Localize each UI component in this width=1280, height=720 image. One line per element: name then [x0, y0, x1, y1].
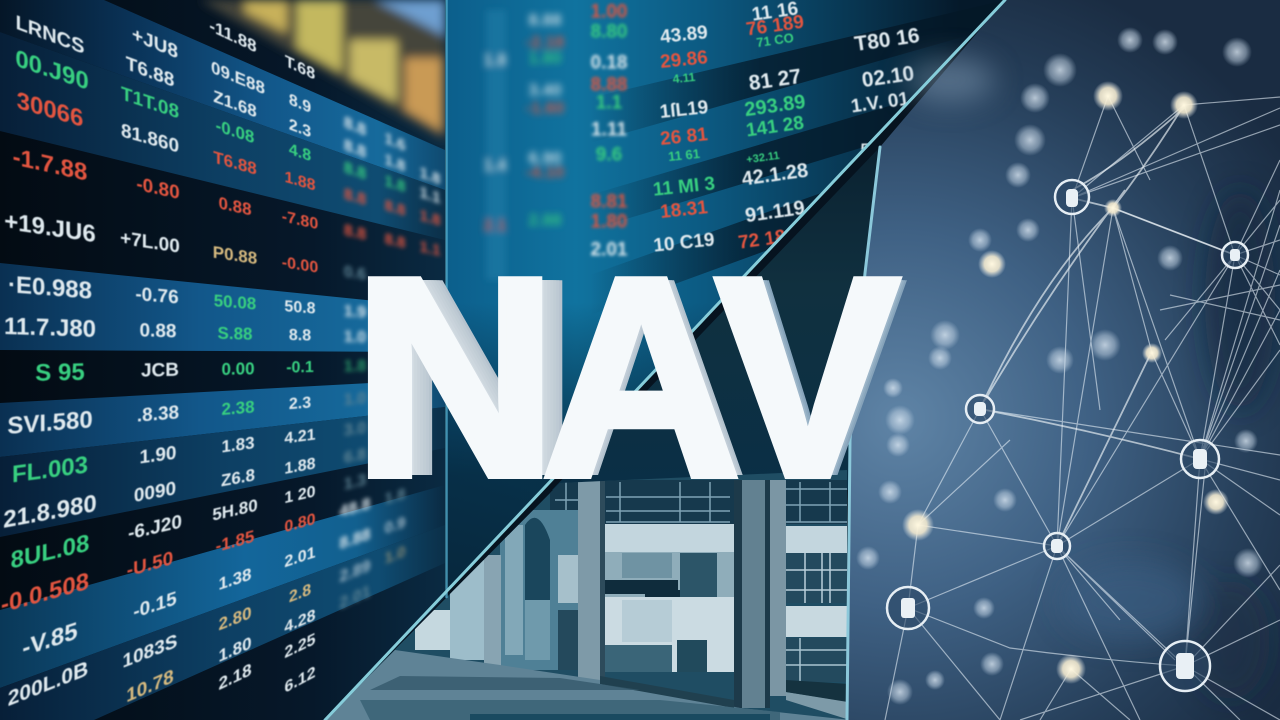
left board figures: 2.8 [289, 580, 311, 606]
columns [484, 480, 786, 708]
left board figures: -0.1 [286, 359, 314, 376]
left board figures: 1.88 [284, 168, 316, 195]
left board figures: -1.7.88 [13, 143, 87, 187]
center board figures: -2.18 [526, 32, 564, 52]
left board figures: 2.38 [221, 397, 255, 419]
center board figures: 29.86 [659, 47, 709, 73]
left board figures: .8.38 [137, 402, 179, 427]
center board figures: 43.89 [659, 22, 709, 48]
center board figures: 9.6 [596, 144, 622, 166]
far blurred columns: 1.8 [420, 164, 441, 189]
far blurred columns: 8.8 [344, 135, 366, 162]
center board figures: 1.80 [528, 48, 562, 68]
center board figures: 8.81 [591, 192, 628, 212]
center board figures: 1.00 [591, 2, 627, 22]
center board figures: +32.11 [746, 150, 780, 166]
bokeh dots [856, 27, 1263, 705]
center board figures: 293.89 [743, 91, 807, 121]
panel: dark wedge behind the letters [552, 147, 880, 490]
far blurred columns: 1.1 [420, 184, 441, 208]
center board figures: 3.40 [528, 80, 562, 100]
left board figures: 6.12 [284, 663, 316, 697]
upper storey glass [550, 480, 850, 524]
floor [325, 650, 850, 720]
center board figures: 76 189 [745, 12, 805, 40]
center board figures: 1.1 [596, 92, 623, 114]
far blurred columns: 1.8 [385, 485, 406, 508]
thick double links [980, 105, 1235, 546]
center board figures: 18.31 [659, 197, 709, 223]
far blurred columns: 6.8 [344, 445, 366, 467]
left board figures: -7.80 [282, 207, 318, 233]
left board figures: T.68 [285, 51, 315, 84]
title: NAV: V [716, 218, 899, 534]
far blurred columns: 8.8 [344, 221, 366, 244]
left board figures: 1083S [123, 630, 177, 673]
left board figures: LRNCS [16, 11, 84, 59]
left board figures: -U.50 [127, 547, 173, 582]
far blurred columns: 1.8 [385, 151, 406, 176]
left board figures: 0.88 [218, 192, 252, 220]
title: NAV: N [353, 218, 557, 534]
left board figures: JCB [141, 360, 179, 382]
center board figures: -1.60 [526, 98, 564, 118]
left board figures: T1T.08 [121, 83, 179, 123]
ring icons [901, 189, 1240, 679]
far blurred columns: 1.8 [420, 207, 441, 230]
left board figures: -V.85 [22, 618, 78, 662]
far blurred columns: 1.3 [344, 471, 366, 494]
left board figures: 1.83 [221, 433, 255, 456]
center board figures: 1.V. 01 [850, 88, 911, 117]
far blurred columns: 48.8 [339, 495, 371, 521]
center board figures [483, 0, 921, 280]
left board figures: -11.88 [209, 15, 257, 57]
title: NAV [353, 218, 907, 534]
center board figures: 91.119 [744, 197, 806, 227]
left board figures: SVI.580 [7, 406, 93, 440]
left board figures: +7L.00 [120, 228, 180, 258]
left board figures: -6.J20 [128, 511, 182, 545]
center board figures: 71 CO [755, 30, 795, 50]
far blurred columns: 8.8 [385, 231, 405, 252]
far blurred columns: 1.0 [385, 543, 406, 568]
left board figures: 8UL.08 [11, 530, 89, 574]
far blurred columns: 8.8 [344, 158, 366, 183]
center board figures: 2.88 [528, 210, 562, 230]
left board figures: P0.88 [213, 243, 257, 268]
left board figures: 1.38 [218, 564, 252, 594]
left board figures: 200L.0B [8, 656, 88, 711]
far blurred columns: 2.01 [339, 581, 371, 613]
left board figures: +19.JU6 [4, 208, 96, 248]
panel: center stock board [446, 0, 1002, 588]
center board figures: 2.01 [591, 240, 628, 260]
left board figures: -0.80 [136, 174, 180, 204]
panel: right network [847, 0, 1280, 720]
left board figures: 00.J90 [15, 45, 89, 96]
left board figures: 2.25 [284, 629, 316, 662]
center board figures: 8.80 [591, 22, 627, 42]
center board figures: 10 C19 [652, 229, 716, 257]
left board figures: 4.28 [284, 605, 316, 637]
left board figures: 30066 [17, 87, 83, 133]
left board figures: 8.8 [289, 327, 311, 345]
left board figures: -0.00 [282, 253, 318, 277]
center board figures: 11 61 [667, 146, 701, 164]
left board figures: T6.88 [213, 147, 257, 179]
left board figures: 4.8 [289, 140, 311, 165]
center board figures: 8.88 [528, 10, 562, 30]
frame lines [325, 0, 1005, 720]
left board figures: Z6.8 [221, 464, 255, 490]
left board figures: -1.85 [216, 526, 255, 556]
center board figures: 1ſL19 [659, 97, 709, 123]
left board figures: 1.80 [218, 633, 252, 666]
left board figures: -0.15 [133, 587, 177, 623]
panel: left stock board [0, 0, 445, 720]
left board figures: FL.003 [12, 451, 88, 489]
far blurred columns: 1.0 [344, 389, 366, 409]
left board figures: 2.80 [218, 602, 252, 634]
far blurred columns: 1.9 [344, 302, 366, 322]
center board figures: 1.80 [591, 212, 627, 232]
far blurred columns: 8.8 [344, 185, 366, 209]
far blurred columns [339, 112, 441, 613]
far blurred columns: 1.0 [344, 329, 366, 346]
center board figures: 11 MI 3 [652, 173, 716, 201]
center board figures: 26 81 [659, 124, 709, 150]
left board figures: 81.860 [121, 119, 179, 158]
left board figures: +JU8 [132, 23, 178, 63]
center board figures: 5 [861, 142, 870, 158]
center board figures: 1.8 [483, 50, 507, 70]
center board figures: 141 28 [745, 113, 805, 141]
center board figures: 6.90 [528, 148, 562, 168]
left board figures: 0090 [134, 478, 176, 507]
center board figures: 42.1.28 [740, 159, 810, 191]
left board figures: T6.88 [126, 53, 174, 92]
soft haze [905, 58, 1275, 700]
left board figures: 50.08 [214, 291, 256, 313]
far blurred columns: 3.0 [344, 419, 366, 440]
board row bands [0, 0, 445, 720]
far blurred columns: 0.6 [344, 263, 366, 284]
windows [604, 552, 848, 682]
far blurred columns: 2.89 [339, 556, 371, 586]
center board figures: 2.1 [483, 216, 507, 234]
center board figures: 0.18 [591, 52, 627, 74]
center board figures: 4.11 [672, 70, 696, 86]
left board figures: 8.9 [289, 90, 311, 117]
center board figures: 8.88 [591, 74, 627, 96]
far blurred columns: 8.88 [339, 525, 371, 553]
far blurred columns: 1.8 [344, 358, 366, 375]
left board figures: 1.88 [284, 454, 316, 478]
center board figures: 1.11 [591, 120, 627, 140]
left board figures: 0.00 [221, 359, 255, 379]
left board figures: 50.8 [284, 297, 316, 318]
center board figures: 02.10 [860, 62, 916, 92]
center board figures: 72 18 [737, 226, 787, 254]
white floor bands [604, 524, 848, 553]
left board figures: 2.3 [289, 115, 311, 141]
left board figures: 0.88 [140, 320, 176, 342]
left board figures: 4.21 [284, 425, 316, 448]
left board figures: ·E0.988 [8, 271, 92, 305]
arched entrance glass [415, 510, 580, 670]
center board figures: -4.10 [526, 162, 564, 182]
far blurred columns: 1.1 [420, 238, 441, 260]
left board figures: 21.8.980 [3, 490, 97, 534]
left board figures: 2.3 [289, 393, 311, 413]
left board figures: 1 20 [284, 482, 316, 507]
center board figures: T80 16 [853, 24, 921, 56]
far blurred columns: 1.8 [385, 172, 406, 196]
left board figures: 2.18 [218, 659, 252, 694]
blurred ticker wall, top right [200, 0, 445, 140]
left board figures: 5H.80 [212, 495, 258, 525]
left board figures: 0.80 [284, 510, 316, 536]
network links [885, 96, 1280, 720]
left board figures: -0.0.508 [1, 568, 89, 619]
ring nodes with icons [887, 180, 1248, 691]
left board figures: 10.78 [126, 666, 174, 707]
center board figures: 81 27 [747, 65, 803, 95]
center board figures: 1.4 [483, 156, 507, 174]
far blurred columns: 0.9 [385, 514, 405, 538]
far blurred columns: 8.8 [385, 197, 406, 220]
left board figures: 1.90 [140, 443, 176, 468]
far blurred columns: 1.6 [385, 130, 406, 155]
left board figures: 2.01 [284, 543, 316, 571]
left board figures: S.88 [218, 324, 252, 344]
panel: building [325, 470, 850, 720]
left board figures [1, 11, 318, 718]
title: NAV: A [542, 218, 740, 534]
left board figures: 09.E88 [211, 57, 265, 98]
left board figures: -0.76 [135, 284, 179, 308]
left board figures: Z1.68 [213, 86, 257, 122]
left board figures: S 95 [35, 359, 85, 387]
left board figures: 11.7.J80 [4, 313, 96, 343]
far blurred columns: 8.8 [344, 112, 366, 140]
bright nodes [902, 81, 1229, 684]
left board figures: -0.08 [216, 115, 255, 147]
